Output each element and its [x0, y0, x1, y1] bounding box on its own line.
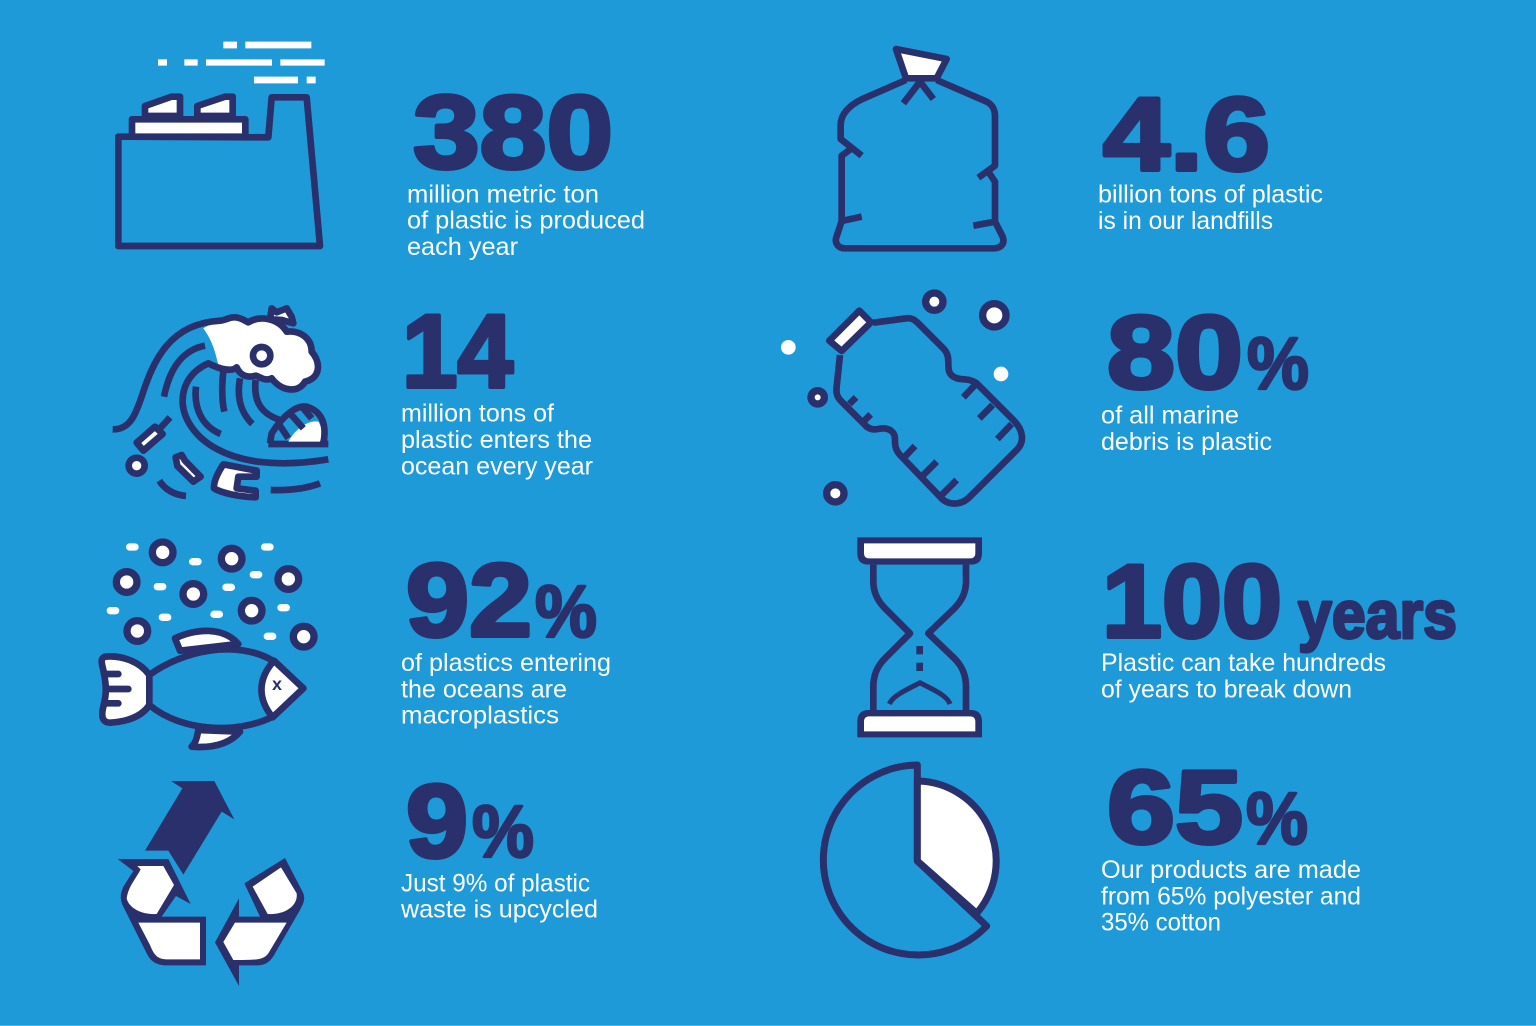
- stat number: 65%: 65: [1107, 750, 1243, 866]
- stat number: 80%: [1107, 295, 1309, 411]
- stat number: 9%: [406, 764, 534, 880]
- stat number: 80%: 80: [1107, 295, 1243, 411]
- stat number: 80%: %: [1247, 322, 1309, 405]
- text: million metric ton of plastic is produced each year: of plastic is produced: [407, 206, 645, 234]
- icon: garbage bag: [836, 49, 1003, 248]
- text: of plastics entering the oceans are macroplastics: [401, 649, 611, 730]
- text: of all marine debris is plastic: of all marine: [1101, 402, 1239, 430]
- text: our products are made from 65% polyester and 35% cotton: [1101, 856, 1361, 936]
- stat number: 92%: 92: [406, 543, 532, 659]
- text: of all marine debris is plastic: [1101, 402, 1272, 456]
- text: of plastics entering the oceans are macroplastics: of plastics entering: [401, 649, 611, 677]
- panel: 65% polyester, 35% cotton: [823, 750, 1361, 955]
- icon: factory with smoke: [118, 42, 325, 246]
- text: our products are made from 65% polyester and 35% cotton: Our products are made: [1101, 856, 1361, 884]
- panel: 14 million tons enter the ocean: [113, 294, 593, 497]
- text: million metric ton of plastic is produced each year: each year: [407, 233, 518, 261]
- text: our products are made from 65% polyester and 35% cotton: from 65% polyester and: [1101, 882, 1361, 910]
- icon: fish among microplastics: x: [272, 674, 282, 694]
- text: of plastics entering the oceans are macroplastics: the oceans are: [401, 676, 567, 704]
- icon: recycling arrows: [118, 781, 304, 986]
- icon: wave with plastic debris: [113, 308, 328, 497]
- text: million tons of plastic enters the ocean every year: million tons of: [401, 400, 554, 428]
- text: million tons of plastic enters the ocean every year: [401, 400, 593, 480]
- text: of plastics entering the oceans are macroplastics: macroplastics: [401, 702, 559, 730]
- text: just 9% of plastic waste is upcycled: Just 9% of plastic: [401, 870, 590, 898]
- stat number: 100 years: [1102, 544, 1457, 660]
- panel: 92% macroplastics: [102, 542, 611, 747]
- stat number: 92%: [406, 543, 597, 659]
- text: million metric ton of plastic is produced each year: [407, 180, 645, 261]
- stat number: 4.6: 4.6: [1103, 77, 1270, 193]
- panel: 100 years to break down: [857, 537, 1457, 737]
- stat number: 65%: %: [1246, 777, 1308, 860]
- icon: crushed plastic bottle: [781, 293, 1022, 504]
- stat number: 92%: %: [535, 570, 597, 653]
- stat number: 380: 380: [413, 75, 613, 191]
- stat number: 65%: [1107, 750, 1308, 866]
- text: just 9% of plastic waste is upcycled: waste is upcycled: [400, 896, 598, 924]
- stat number: 100 years: 100: [1102, 544, 1282, 660]
- panel: 380 million metric tons produced: [118, 42, 645, 261]
- text: plastic can take hundreds of years to break down: [1101, 649, 1386, 704]
- text: million tons of plastic enters the ocean every year: ocean every year: [401, 452, 593, 480]
- panel: 9% upcycled: [118, 764, 598, 986]
- text: million metric ton of plastic is produced each year: million metric ton: [407, 180, 599, 208]
- icon: pie chart: [823, 765, 996, 955]
- text: plastic can take hundreds of years to break down: of years to break down: [1101, 676, 1352, 704]
- stat number: 14: 14: [402, 294, 513, 410]
- panel: 4.6 billion tons in landfills: [836, 49, 1323, 248]
- stat number: 9%: 9: [406, 764, 468, 880]
- text: plastic can take hundreds of years to break down: Plastic can take hundreds: [1101, 649, 1386, 677]
- text: billion tons of plastic is in our landfills: [1098, 180, 1323, 235]
- stat number: 100 years: years: [1298, 577, 1457, 653]
- text: just 9% of plastic waste is upcycled: [400, 870, 598, 924]
- icon: hourglass: [857, 537, 982, 737]
- icon: fish among microplastics: [102, 542, 314, 747]
- text: billion tons of plastic is in our landfills: billion tons of plastic: [1098, 180, 1323, 208]
- text: our products are made from 65% polyester and 35% cotton: 35% cotton: [1101, 908, 1221, 936]
- text: billion tons of plastic is in our landfills: is in our landfills: [1098, 207, 1273, 235]
- text: million tons of plastic enters the ocean every year: plastic enters the: [401, 426, 592, 454]
- panel: 80% marine debris: [781, 293, 1309, 504]
- text: of all marine debris is plastic: debris is plastic: [1101, 428, 1272, 456]
- stat number: 9%: %: [472, 790, 534, 873]
